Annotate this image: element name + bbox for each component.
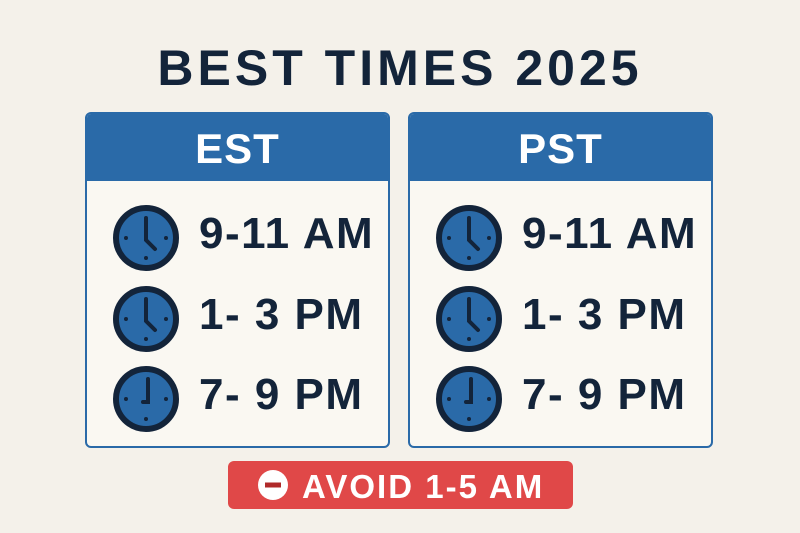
row: 7-9 PM	[436, 366, 687, 432]
row: 1-3 PM	[436, 286, 687, 352]
header: PST: PST	[518, 125, 603, 172]
row: 1-3 PM: 1- 3 PM	[522, 290, 687, 339]
panel: PST	[408, 112, 713, 448]
row: 7-9 PM: 7- 9 PM	[522, 370, 687, 419]
row: 7-9 PM	[113, 366, 364, 432]
title: BEST TIMES 2025	[157, 40, 643, 96]
row: 1-3 PM: 1- 3 PM	[199, 290, 364, 339]
row: 9-11 AM	[436, 205, 697, 271]
row: 7-9 PM: 7- 9 PM	[199, 370, 364, 419]
row: 9-11 AM	[113, 205, 374, 271]
header: EST	[87, 114, 388, 181]
header: PST	[410, 114, 711, 181]
icon: no entry	[258, 470, 288, 500]
callout text: AVOID 1-5 AM	[302, 468, 544, 505]
row: 9-11 AM: 9-11 AM	[199, 209, 374, 258]
row: 9-11 AM: 9-11 AM	[522, 209, 697, 258]
callout: avoid	[228, 461, 573, 509]
panel: EST	[85, 112, 390, 448]
row: 1-3 PM	[113, 286, 364, 352]
header: EST: EST	[195, 125, 280, 172]
